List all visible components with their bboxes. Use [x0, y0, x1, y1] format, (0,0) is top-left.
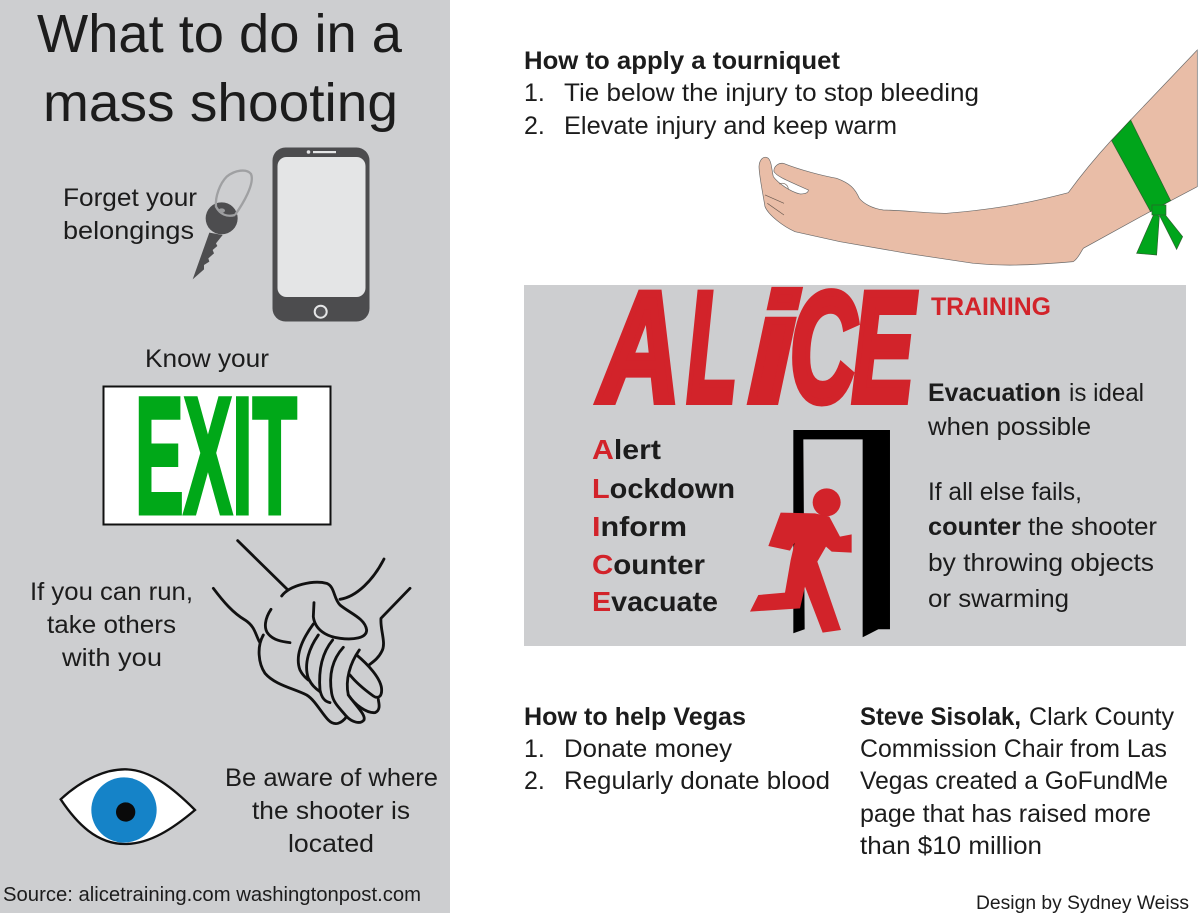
list: ALICE steps: Lockdown [592, 473, 735, 504]
icon: person running through door [750, 430, 890, 637]
logo: ALICE wordmark: i [749, 264, 798, 434]
list: ALICE steps: Inform [592, 511, 687, 542]
text: if you can run: with you [61, 644, 162, 672]
list: ALICE steps [592, 434, 735, 617]
text: forget your belongings [63, 184, 197, 245]
text: be aware of where the shooter is located: the shooter is [252, 797, 410, 825]
text: counter the shooter: by throwing objects [928, 549, 1154, 577]
icon: arm with tourniquet [759, 50, 1197, 265]
list: ALICE steps: Counter [592, 549, 705, 580]
text: be aware of where the shooter is located: located [288, 830, 374, 858]
title: What to do in a [37, 4, 403, 64]
panel: ALICE training [524, 261, 1186, 646]
logo: ALICE wordmark [597, 261, 916, 435]
text: if you can run: If you can run, [30, 578, 193, 606]
text block: how to apply a tourniquet: Tie below the injury to stop bleeding [564, 79, 979, 107]
panel: what to do in a mass shooting [0, 0, 450, 913]
text block: Steve Sisolak GoFundMe: than $10 million [860, 832, 1042, 860]
list: ALICE steps: Evacuate [592, 586, 718, 617]
text: counter the shooter: the shooter [1028, 513, 1157, 541]
logo: ALICE wordmark: C [790, 261, 857, 435]
text: evacuation is ideal: when possible [927, 413, 1091, 441]
text block: Steve Sisolak GoFundMe [860, 703, 1174, 860]
credit line: Design by Sydney Weiss [976, 893, 1189, 914]
text block: how to apply a tourniquet: Elevate injury and keep warm [564, 112, 897, 140]
text block: Steve Sisolak GoFundMe: Vegas created a GoFundMe [860, 767, 1168, 795]
text block: how to help Vegas: 2. [524, 767, 545, 795]
text block: how to apply a tourniquet [524, 47, 979, 140]
text block: how to apply a tourniquet: 2. [524, 112, 545, 140]
text block: Steve Sisolak GoFundMe: page that has raised more [860, 800, 1151, 828]
text block: how to apply a tourniquet: 1. [524, 79, 545, 107]
icon: eye [61, 769, 195, 844]
text block: how to help Vegas: How to help Vegas [524, 703, 746, 731]
logo: ALICE wordmark: L [687, 261, 737, 435]
text: be aware of where the shooter is located: Be aware of where [225, 764, 438, 792]
text block: how to help Vegas: Regularly donate blood [564, 767, 830, 795]
text block: Steve Sisolak GoFundMe: Commission Chair from Las [860, 735, 1167, 763]
text: counter the shooter [928, 478, 1157, 613]
logo: ALICE wordmark: A [597, 261, 680, 435]
source line: Source: alicetraining.com washingtonpost.com [3, 884, 421, 906]
label: training: TRAINING [931, 293, 1051, 321]
text: forget your belongings: Forget your [63, 184, 197, 212]
icon: exit sign: EXIT [135, 364, 297, 549]
text: counter the shooter: counter [928, 513, 1021, 541]
text: evacuation is ideal: is ideal [1069, 379, 1144, 407]
text: counter the shooter: If all else fails, [928, 478, 1082, 506]
title [37, 4, 403, 133]
title: mass shooting [43, 73, 398, 133]
text: evacuation is ideal [927, 379, 1144, 441]
icon: smartphone [272, 148, 370, 322]
text block: how to apply a tourniquet: How to apply a tourniquet [524, 47, 841, 75]
icon: exit sign [104, 364, 330, 549]
text block: how to help Vegas: 1. [524, 735, 545, 763]
icon: holding hands [213, 541, 410, 724]
text block: Steve Sisolak GoFundMe: Clark County [1029, 703, 1174, 731]
logo: ALICE wordmark: E [852, 261, 916, 435]
text: if you can run: take others [47, 611, 176, 639]
text: if you can run [30, 578, 193, 672]
list: ALICE steps: Alert [592, 434, 661, 465]
text: be aware of where the shooter is located [225, 764, 438, 858]
text block: Steve Sisolak GoFundMe: Steve Sisolak, [860, 703, 1021, 731]
icon: key on ring [193, 171, 252, 279]
text: counter the shooter: or swarming [928, 585, 1069, 613]
text: evacuation is ideal: Evacuation [928, 379, 1061, 407]
text: know your: Know your [145, 345, 269, 373]
text block: how to help Vegas [524, 703, 830, 795]
text block: how to help Vegas: Donate money [564, 735, 733, 763]
text: forget your belongings: belongings [63, 217, 194, 245]
